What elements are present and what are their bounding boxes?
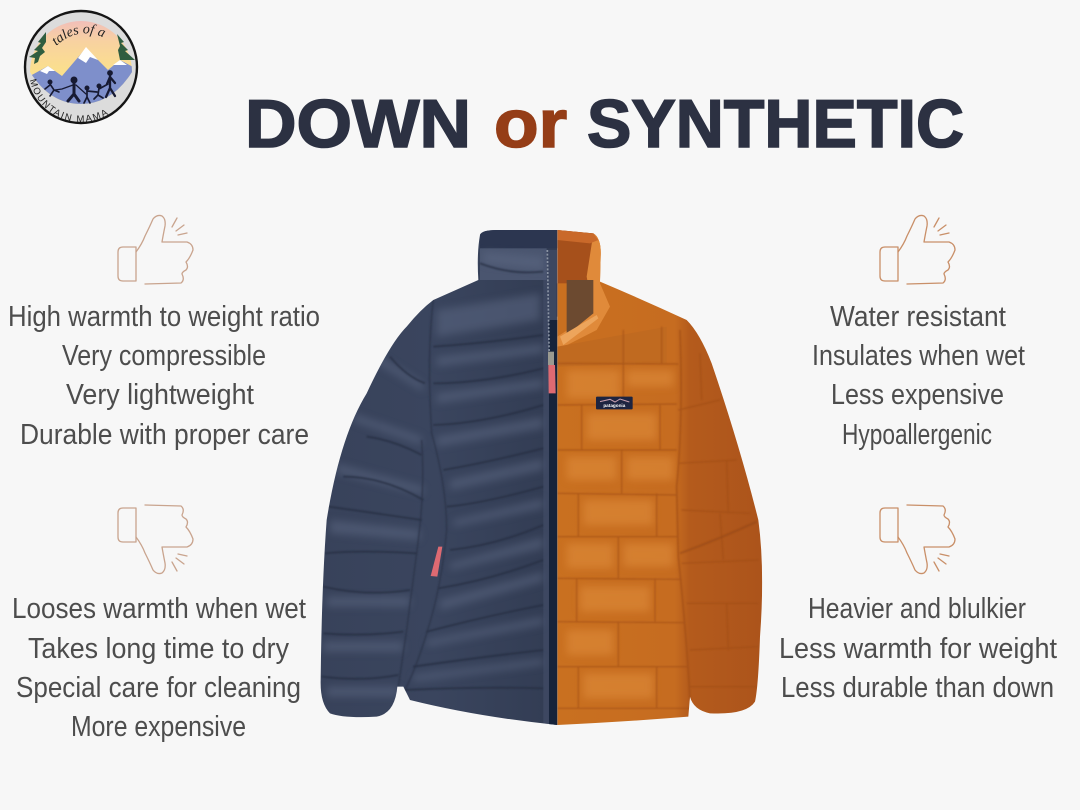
panel: down pros: High warmth to weight ratio: [8, 301, 320, 333]
title: [245, 86, 964, 162]
panel: synthetic pros: [812, 301, 1025, 451]
zipper pull: [548, 352, 556, 393]
panel: down cons: Looses warmth when wet: [12, 593, 306, 625]
panel: down cons: [12, 593, 306, 743]
icon: down thumbs down: [118, 505, 193, 574]
panel: synthetic pros: Less expensive: [831, 379, 1004, 411]
panel: down pros: Very compressible: [62, 340, 266, 372]
logo band text: MOUNTAIN MAMA: [30, 78, 108, 122]
title: SYNTHETIC: [587, 86, 964, 162]
panel: down pros: Very lightweight: [66, 379, 254, 411]
logo: Tales of a Mountain Mama: [24, 10, 138, 124]
icon: down thumbs up: [118, 215, 193, 284]
panel: synthetic pros: Hypoallergenic: [842, 419, 992, 451]
chest patch: [596, 397, 633, 409]
icon: synthetic thumbs down: [880, 505, 955, 574]
jacket: synthetic half: [557, 220, 771, 730]
title: or: [494, 86, 567, 162]
panel: synthetic cons: Heavier and blulkier: [808, 593, 1026, 625]
panel: synthetic cons: [779, 593, 1057, 704]
panel: synthetic pros: Insulates when wet: [812, 340, 1025, 372]
logo script text: tales of a: [52, 24, 106, 46]
pocket pull: [431, 547, 442, 577]
chest patch: patagonia: [603, 403, 626, 408]
panel: down cons: Takes long time to dry: [28, 633, 289, 665]
panel: synthetic pros: Water resistant: [830, 301, 1006, 333]
jacket illustration: [310, 220, 771, 730]
panel: synthetic cons: Less warmth for weight: [779, 633, 1057, 665]
zipper tape: [543, 250, 557, 727]
panel: down cons: Special care for cleaning: [16, 672, 301, 704]
panel: synthetic cons: Less durable than down: [781, 672, 1054, 704]
panel: down pros: Durable with proper care: [20, 419, 309, 451]
panel: down pros: [8, 301, 320, 451]
panel: down cons: More expensive: [71, 711, 246, 743]
icon: pine trees: [29, 32, 135, 64]
icon: synthetic thumbs up: [880, 215, 955, 284]
family silhouettes: [45, 71, 115, 103]
jacket: down half: [320, 230, 558, 725]
title: DOWN: [245, 86, 471, 162]
